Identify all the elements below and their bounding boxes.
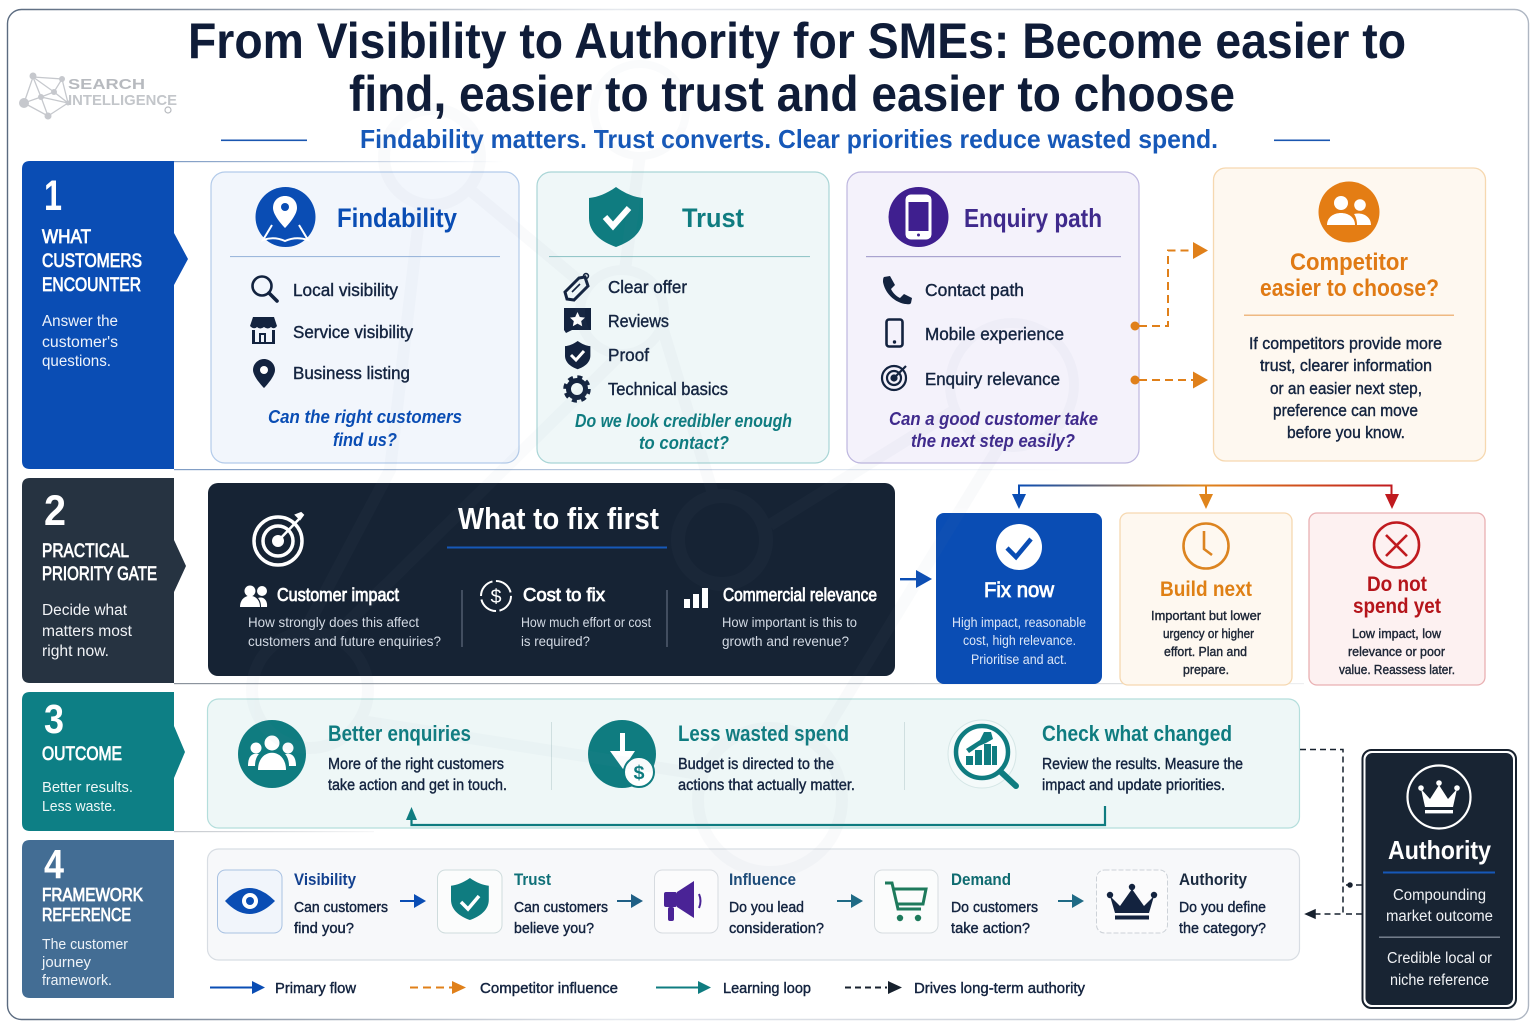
text: credible reference <box>1387 950 1492 989</box>
section 1 label: what customers encounter: 1 <box>44 172 62 220</box>
heading: do not spend yet: spend yet <box>1353 595 1441 618</box>
icon: magnifier with chart <box>948 720 1016 788</box>
text: customer impact: customers and future enquiries? <box>248 633 441 649</box>
panel: findability <box>211 172 519 463</box>
text: business listing: Business listing <box>293 363 410 383</box>
text: clear offer: Clear offer <box>608 277 687 297</box>
text: build next description <box>1151 608 1262 677</box>
text: fix now description <box>952 615 1086 667</box>
section 2 label: practical priority gate: Decide what <box>42 602 128 619</box>
arrow: visibility to trust <box>400 894 426 908</box>
section 1 label: what customers encounter: WHAT <box>42 227 91 248</box>
title: From Visibility to Authority for SMEs: Become easier to <box>188 13 1406 69</box>
heading: what to fix first: What to fix first <box>458 501 659 536</box>
section 2 label: practical priority gate <box>22 478 186 683</box>
text: competitor description: If competitors provide more <box>1249 335 1442 353</box>
text: do not spend description: value. Reassess later. <box>1339 662 1455 677</box>
text: visibility <box>294 870 388 937</box>
text: build next description: urgency or higher <box>1163 626 1255 641</box>
heading: findability: Findability <box>337 203 457 233</box>
text: less wasted spend: Less wasted spend <box>678 721 849 746</box>
text: visibility: Can customers <box>294 900 388 916</box>
text: reviews: Reviews <box>608 311 669 331</box>
icon: search <box>252 276 277 301</box>
section 3 label: outcome: 3 <box>44 696 64 742</box>
text: demand: Demand <box>951 870 1011 889</box>
text: enquiry relevance: Enquiry relevance <box>925 369 1060 389</box>
text: check what changed: Check what changed <box>1042 721 1232 746</box>
legend: competitor influence: Competitor influence <box>480 981 618 997</box>
icon: down arrow with dollar: $ <box>634 763 645 784</box>
section 1 label: what customers encounter: Answer the <box>42 313 118 330</box>
heading: competitor: Competitor <box>1290 249 1408 276</box>
text: cost to fix: is required? <box>521 634 590 649</box>
logo: Search Intelligence: SEARCH <box>68 76 145 93</box>
icon: cart tile <box>874 870 938 933</box>
watermark: network magnifier <box>252 64 1074 872</box>
text: cost to fix: Cost to fix <box>523 585 605 605</box>
text: do not spend description: Low impact, low <box>1352 626 1442 641</box>
section 1 label: what customers encounter: ENCOUNTER <box>42 275 141 296</box>
text: trust: Can customers <box>514 900 608 916</box>
panel: trust <box>537 172 829 463</box>
icon: crown <box>1408 766 1470 828</box>
heading: enquiry path: Enquiry path <box>964 203 1102 233</box>
text: contact path: Contact path <box>925 280 1024 300</box>
question: trust: Do we look credibler enough <box>575 411 792 431</box>
text: authority: Authority <box>1179 870 1247 889</box>
heading: build next: Build next <box>1160 578 1252 601</box>
question: enquiry path: the next step easily? <box>911 431 1075 451</box>
legend: learning loop <box>656 981 811 997</box>
text: influence: consideration? <box>729 921 824 937</box>
arrow: drives long-term authority connector <box>1300 750 1362 918</box>
title: find, easier to trust and easier to choose <box>349 66 1235 122</box>
card: fix now <box>936 513 1102 684</box>
text: trust: believe you? <box>514 921 594 937</box>
text: influence <box>729 870 824 937</box>
section 4 label: framework reference <box>22 840 174 998</box>
section 2 label: practical priority gate: right now. <box>42 643 109 660</box>
logo: Search Intelligence: INTELLIGENCE <box>68 92 177 109</box>
section 1 label: what customers encounter: customer's <box>42 334 118 351</box>
question: enquiry path <box>889 409 1098 451</box>
heading: do not spend yet <box>1353 573 1441 618</box>
text: visibility: Visibility <box>294 870 356 889</box>
text: commercial relevance <box>722 585 877 649</box>
icon: group of people <box>238 720 306 788</box>
legend: competitor influence <box>410 981 618 997</box>
heading: competitor <box>1260 249 1439 302</box>
icon: check <box>996 524 1042 570</box>
text: influence: Do you lead <box>729 900 804 916</box>
text: visibility: find you? <box>294 921 354 937</box>
arrow: priority branches <box>1012 485 1399 509</box>
panel: enquiry path <box>847 172 1139 463</box>
text: proof: Proof <box>608 345 649 365</box>
text: competitor description: or an easier next step, <box>1270 380 1422 398</box>
heading: trust: Trust <box>682 203 744 233</box>
text: competitor description: preference can move <box>1273 402 1418 420</box>
section 4 label: framework reference: REFERENCE <box>42 905 131 925</box>
text: better enquiries: take action and get in touch. <box>328 777 507 794</box>
icon: review star <box>564 308 591 333</box>
text: less wasted spend <box>678 721 855 794</box>
section 1 label: what customers encounter: CUSTOMERS <box>42 251 142 272</box>
text: less wasted spend: Budget is directed to the <box>678 756 834 773</box>
question: findability: Can the right customers <box>268 407 462 427</box>
text: commercial relevance: growth and revenue? <box>722 634 849 649</box>
text: better enquiries: More of the right customers <box>328 756 504 773</box>
section 2 label: practical priority gate: PRIORITY GATE <box>42 564 157 585</box>
icon: dollar: $ <box>490 587 502 608</box>
text: trust <box>514 870 608 937</box>
section 4 label: framework reference: 4 <box>44 841 64 887</box>
subtitle: Findability matters. Trust converts. Clear priorities reduce wasted spend. <box>360 124 1218 154</box>
arrow: learning loop <box>406 806 1105 825</box>
arrow: influence to demand <box>837 894 863 908</box>
icon: mobile <box>886 320 902 346</box>
text: competitor description: before you know. <box>1287 424 1405 442</box>
text: less wasted spend: actions that actually matter. <box>678 777 855 794</box>
section 4 label: framework reference: The customer <box>42 936 128 953</box>
text: cost to fix <box>521 585 651 649</box>
question: trust: to contact? <box>639 433 729 453</box>
text: customer impact: How strongly does this affect <box>248 614 419 630</box>
section band lines <box>174 161 1304 832</box>
section 3 label: outcome <box>22 692 185 831</box>
logo: Search Intelligence <box>19 72 177 120</box>
section 2 label: practical priority gate: matters most <box>42 623 133 640</box>
icon: storefront <box>250 317 277 344</box>
legend: drives long-term authority <box>845 981 1086 997</box>
icon: location pin <box>253 359 275 388</box>
text: demand <box>951 870 1038 937</box>
section 3 label: outcome: OUTCOME <box>42 744 122 765</box>
panel: authority <box>1362 750 1516 1008</box>
icon: down arrow with dollar <box>588 720 656 788</box>
section 2 label: practical priority gate: 2 <box>44 487 66 535</box>
text: local visibility: Local visibility <box>293 280 398 300</box>
text: influence: Influence <box>729 870 796 889</box>
text: better enquiries <box>328 721 507 794</box>
section 4 label: framework reference: FRAMEWORK <box>42 885 143 905</box>
text: authority: the category? <box>1179 921 1266 937</box>
icon: dollar <box>481 581 511 611</box>
icon: competitor people <box>1318 182 1380 242</box>
text: credible reference: niche reference <box>1390 972 1489 989</box>
section 3 label: outcome: Less waste. <box>42 798 116 815</box>
text: mobile experience: Mobile experience <box>925 324 1064 344</box>
section 1 label: what customers encounter <box>22 161 188 469</box>
text: competitor description: trust, clearer information <box>1260 357 1432 375</box>
text: do not spend description <box>1339 626 1455 677</box>
text: trust: Trust <box>514 870 551 889</box>
icon: smartphone <box>888 187 948 247</box>
text: commercial relevance: Commercial relevance <box>723 585 877 605</box>
text: do not spend description: relevance or poor <box>1348 644 1446 659</box>
text: compounding market outcome: market outcome <box>1386 908 1493 925</box>
panel: outcomes <box>208 699 1300 828</box>
text: check what changed: impact and update priorities. <box>1042 777 1225 794</box>
text: competitor description <box>1249 335 1442 442</box>
text: authority: Do you define <box>1179 900 1266 916</box>
legend: primary flow <box>210 981 357 997</box>
text: check what changed: Review the results. Measure the <box>1042 756 1243 773</box>
text: demand: take action? <box>951 921 1030 937</box>
legend: learning loop: Learning loop <box>723 981 811 997</box>
heading: do not spend yet: Do not <box>1367 573 1427 596</box>
text: customer impact <box>248 585 441 649</box>
text: authority <box>1179 870 1266 937</box>
text: service visibility: Service visibility <box>293 322 413 342</box>
text: check what changed <box>1042 721 1243 794</box>
icon: target <box>882 366 906 390</box>
legend <box>210 981 1086 997</box>
arrow: trust to influence <box>617 894 643 908</box>
text: fix now description: cost, high relevance. <box>963 633 1076 648</box>
text: cost to fix: How much effort or cost <box>521 615 651 630</box>
icon: shield tile <box>438 870 502 933</box>
icon: customer people <box>240 586 267 607</box>
icon: target <box>254 513 303 565</box>
arrow: demand to authority <box>1058 894 1084 908</box>
card: do not spend yet <box>1309 513 1485 685</box>
panel: what to fix first <box>208 483 895 676</box>
section 3 label: outcome: Better results. <box>42 779 133 796</box>
text: fix now description: High impact, reasonable <box>952 615 1086 630</box>
icon: cross <box>1374 522 1419 568</box>
title <box>188 13 1406 122</box>
question: findability <box>268 407 462 450</box>
panel: competitor <box>1214 168 1486 461</box>
text: commercial relevance: How important is this to <box>722 615 857 630</box>
icon: eye tile <box>218 870 282 933</box>
text: customer impact: Customer impact <box>277 585 399 605</box>
arrow: competitor influence lower <box>1130 372 1208 388</box>
icon: megaphone tile <box>654 870 718 933</box>
text: fix now description: Prioritise and act. <box>971 652 1067 667</box>
text: technical basics: Technical basics <box>608 379 728 399</box>
text: build next description: Important but lower <box>1151 608 1262 623</box>
section 4 label: framework reference: framework. <box>42 972 112 989</box>
text: better enquiries: Better enquiries <box>328 721 471 746</box>
icon: clock <box>1184 524 1228 568</box>
heading: authority: Authority <box>1388 835 1491 865</box>
arrow: to fix now <box>900 570 932 588</box>
text: demand: Do customers <box>951 900 1038 916</box>
heading: fix now: Fix now <box>984 579 1055 602</box>
icon: crown tile <box>1096 870 1168 933</box>
section 1 label: what customers encounter: questions. <box>42 353 111 370</box>
icon: price tag <box>565 274 588 300</box>
legend: drives long-term authority: Drives long-term authority <box>914 981 1086 997</box>
icon: bar chart <box>684 588 708 608</box>
text: build next description: prepare. <box>1183 662 1229 677</box>
icon: map pin <box>256 187 316 247</box>
icon: proof shield <box>565 341 590 369</box>
panel: customer journey framework <box>208 849 1300 960</box>
text: build next description: effort. Plan and <box>1164 644 1247 659</box>
icon: phone <box>883 276 912 304</box>
question: trust <box>575 411 792 453</box>
section 4 label: framework reference: journey <box>41 954 91 971</box>
question: findability: find us? <box>333 430 397 450</box>
icon: trust shield <box>589 187 643 247</box>
heading: competitor: easier to choose? <box>1260 275 1439 302</box>
text: credible reference: Credible local or <box>1387 950 1492 967</box>
text: compounding market outcome <box>1386 887 1493 925</box>
section 2 label: practical priority gate: PRACTICAL <box>42 541 129 562</box>
legend: primary flow: Primary flow <box>275 981 357 997</box>
arrow: competitor influence upper <box>1130 242 1208 330</box>
question: enquiry path: Can a good customer take <box>889 409 1098 429</box>
card: build next <box>1120 513 1292 685</box>
icon: gear <box>565 377 589 401</box>
text: compounding market outcome: Compounding <box>1393 887 1486 904</box>
